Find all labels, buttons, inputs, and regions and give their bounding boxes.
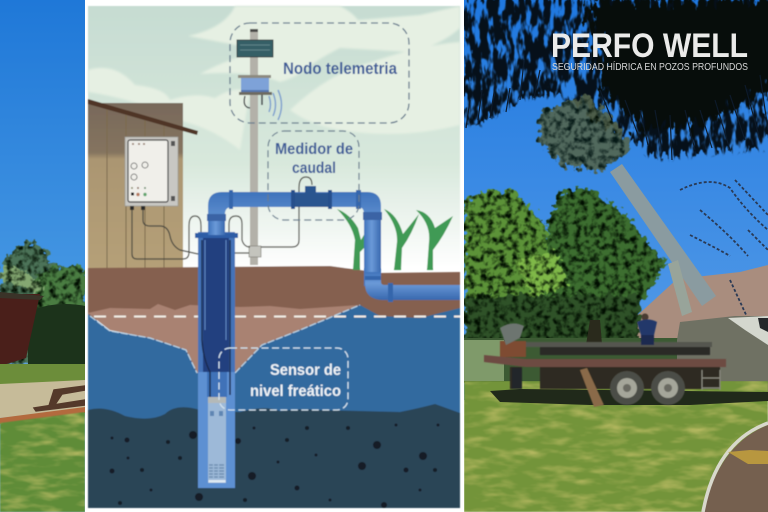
bedrock <box>88 404 460 508</box>
left photo: brick edging <box>0 407 85 424</box>
pipe load <box>500 341 712 357</box>
well head flange <box>195 233 238 238</box>
tree trunk <box>586 320 602 342</box>
lawn <box>464 381 768 512</box>
label: Medidor de caudal: caudal <box>292 160 336 177</box>
water table dashed line <box>94 316 460 318</box>
left photo: cabin roof <box>0 292 44 300</box>
left photo panel <box>0 0 85 512</box>
centre diagram panel <box>88 6 460 508</box>
callout: flow meter <box>268 131 359 220</box>
second wheel <box>651 371 685 405</box>
hanging twigs <box>466 60 768 160</box>
corn plants <box>337 209 453 270</box>
cabin roof <box>88 99 198 135</box>
trees <box>464 188 665 345</box>
lower pipe elbow <box>365 272 460 300</box>
well cables <box>202 240 230 397</box>
bare branches <box>680 179 768 315</box>
canopy: dense centre <box>585 0 768 130</box>
truck shadow <box>490 389 768 405</box>
worker at the rear <box>500 323 524 389</box>
ground: topsoil <box>88 266 460 320</box>
sky <box>88 6 460 268</box>
sky <box>464 0 768 400</box>
fallen leaves <box>728 450 768 464</box>
bedrock pebbles <box>110 424 440 508</box>
garden bed soil <box>704 425 768 512</box>
label: Sensor de nivel freático: Sensor de <box>270 362 341 379</box>
truck cab and machinery <box>677 316 768 392</box>
truck bed <box>484 355 726 367</box>
pump <box>208 397 226 483</box>
cabin wall <box>88 103 183 268</box>
callout: telemetry node <box>230 23 409 123</box>
water pipe network <box>207 186 460 302</box>
label: Sensor de nivel freático: nivel freático <box>250 383 341 400</box>
backdrop behind truck <box>464 338 684 383</box>
clouds <box>88 6 460 150</box>
label: Medidor de caudal: Medidor de <box>275 141 353 158</box>
canopy: sunlit leaves <box>538 95 630 172</box>
step ladder <box>702 370 720 390</box>
telemetry node box <box>238 75 272 108</box>
cone dashed outline <box>90 305 360 373</box>
garden bed curb <box>703 423 768 512</box>
canopy: streaky foliage <box>464 0 768 160</box>
label: Nodo telemetria: Nodo telemetria <box>283 60 398 78</box>
cabin plank lines <box>107 108 164 268</box>
title: PERFO WELL: PERFO WELL <box>551 27 748 65</box>
callout: water level sensor <box>219 348 348 410</box>
telemetry pole <box>250 29 258 265</box>
solar panel <box>237 40 273 57</box>
left photo: trees and palm <box>0 240 85 365</box>
junction box <box>249 246 261 257</box>
flow meter <box>291 186 332 209</box>
rear wheel <box>610 371 644 405</box>
control cabinet <box>125 137 178 210</box>
control cables <box>132 177 312 259</box>
flatbed truck <box>484 314 726 407</box>
background fence <box>464 340 504 381</box>
left photo: back lawn <box>0 364 85 384</box>
right photo panel <box>464 0 768 512</box>
wireless signal icon <box>269 90 282 120</box>
crane mast <box>610 164 716 316</box>
mountains <box>636 265 768 338</box>
ground: pale soil cone <box>88 304 360 375</box>
left photo: cabin <box>0 294 40 366</box>
worker on the bed <box>637 314 657 345</box>
groundwater <box>88 305 460 420</box>
support plank <box>580 368 604 407</box>
left photo: wooden bench <box>34 386 85 411</box>
left photo: dark shrub <box>28 304 85 365</box>
left photo: sandy ground <box>0 380 85 418</box>
well casing <box>195 232 238 488</box>
left photo: lawn <box>0 412 85 512</box>
